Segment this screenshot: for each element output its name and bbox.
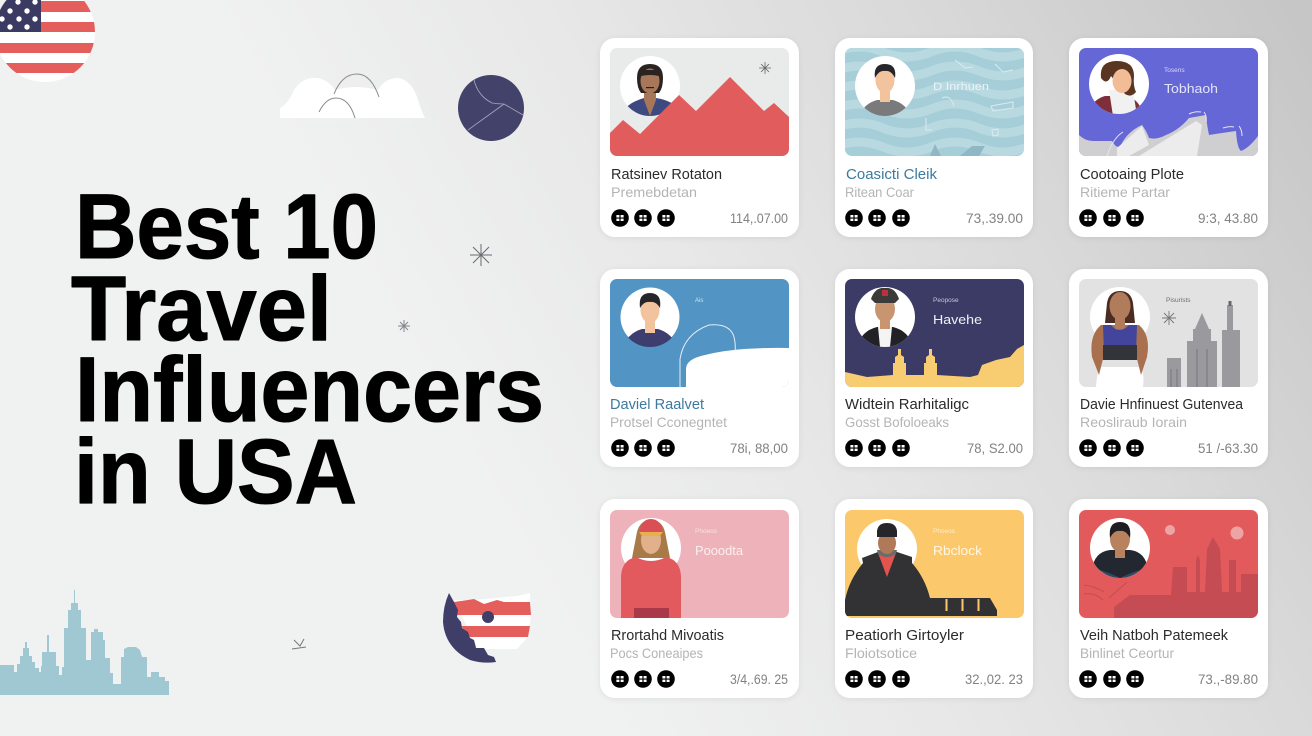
card 4 name: Daviel Raalvet — [610, 397, 704, 413]
card 9 social icons — [1079, 670, 1144, 688]
card 3 role: Ritieme Partar — [1080, 185, 1170, 200]
card 2 name: Coasicti Cleik — [846, 167, 938, 183]
card 7 small caption: Phoeos — [695, 528, 718, 535]
card 3 social icons — [1079, 209, 1144, 227]
panel: card 9 — [1069, 499, 1268, 698]
card 8 social icons — [845, 670, 910, 688]
card 8 illustration — [845, 510, 1024, 618]
panel: card 8 — [835, 499, 1033, 698]
panel: card 7 — [600, 499, 799, 698]
card 7 social icons — [611, 670, 675, 688]
card 8 image caption: Rbclock — [933, 544, 983, 558]
panel: card 5 — [835, 269, 1033, 467]
card 5 illustration — [845, 279, 1024, 387]
card 5 figure: 78, S2.00 — [967, 441, 1023, 456]
icon: sparkle small — [398, 320, 410, 332]
card 9 role: Binlinet Ceortur — [1080, 646, 1174, 661]
icon: torn flag badge — [443, 593, 531, 663]
icon: sparkle large — [470, 244, 492, 266]
title — [71, 176, 544, 523]
title: Influencers — [75, 339, 544, 441]
card 4 illustration — [610, 279, 789, 387]
card 6 role: Reosliraub Iorain — [1080, 415, 1187, 430]
card 2 role: Ritean Coar — [845, 185, 914, 200]
card 6 figure: 51 /-63.30 — [1198, 441, 1258, 456]
card 3 image caption: Tobhaoh — [1164, 82, 1218, 96]
card 5 name: Widtein Rarhitaligc — [845, 397, 969, 413]
card 8 name: Peatiorh Girtoyler — [845, 628, 964, 644]
card 2 illustration — [845, 48, 1024, 156]
city skyline — [0, 590, 169, 695]
card 1 name: Ratsinev Rotaton — [611, 167, 722, 183]
card 3 name: Cootoaing Plote — [1080, 167, 1184, 183]
card 2 social icons — [845, 209, 910, 227]
title: Best 10 — [75, 176, 378, 278]
card 1 illustration — [610, 48, 789, 156]
card 6 small caption: Pisurists — [1166, 297, 1191, 304]
icon: bottom sparkle — [292, 639, 306, 649]
card 8 small caption: Phoeos — [933, 528, 956, 535]
card 6 illustration — [1079, 279, 1258, 387]
panel: card 2 — [835, 38, 1033, 238]
card 9 name: Veih Natboh Patemeek — [1080, 628, 1229, 644]
card 3 figure: 9:3, 43.80 — [1198, 211, 1258, 226]
card 2 image caption: D Inrhuen — [933, 81, 989, 93]
card 6 name: Davie Hnfinuest Gutenvea — [1080, 397, 1244, 413]
card 7 name: Rrortahd Mivoatis — [611, 628, 724, 644]
card 7 figure: 3/4,.69. 25 — [730, 672, 788, 687]
title: Travel — [71, 258, 332, 360]
card 1 social icons — [611, 209, 675, 227]
card 3 illustration — [1079, 48, 1258, 156]
card 7 image caption: Pooodta — [695, 544, 743, 558]
card 9 figure: 73.,-89.80 — [1198, 672, 1258, 687]
panel: card 6 — [1069, 269, 1268, 467]
card 4 figure: 78i, 88,00 — [730, 441, 788, 456]
card 8 figure: 32.,02. 23 — [965, 672, 1023, 687]
card 8 role: Floiotsotice — [845, 646, 917, 661]
card 5 small caption: Peopose — [933, 297, 959, 304]
card 1 role: Premebdetan — [611, 185, 697, 200]
icon: american flag circle — [0, 0, 100, 82]
card 5 role: Gosst Bofoloeaks — [845, 415, 949, 430]
card 3 small caption: Tosens — [1164, 67, 1185, 74]
card 1 figure: 114,.07.00 — [730, 211, 788, 226]
card 4 social icons — [611, 439, 675, 457]
icon: cloud with arcs — [280, 74, 425, 118]
panel: card 4 — [600, 269, 799, 467]
card 5 social icons — [845, 439, 910, 457]
panel: card 3 — [1069, 38, 1268, 237]
card 9 illustration — [1079, 510, 1258, 618]
card 7 role: Pocs Coneaipes — [610, 646, 703, 661]
card 7 illustration — [610, 510, 789, 618]
panel: card 1 — [600, 38, 799, 237]
title: in USA — [74, 421, 357, 523]
card 4 role: Protsel Cconegntet — [610, 415, 727, 430]
card 6 social icons — [1079, 439, 1144, 457]
card 4 small caption: Ais — [695, 298, 703, 304]
card 5 image caption: Havehe — [933, 313, 982, 327]
card 2 figure: 73,.39.00 — [966, 211, 1023, 226]
icon: navy globe — [458, 75, 524, 141]
